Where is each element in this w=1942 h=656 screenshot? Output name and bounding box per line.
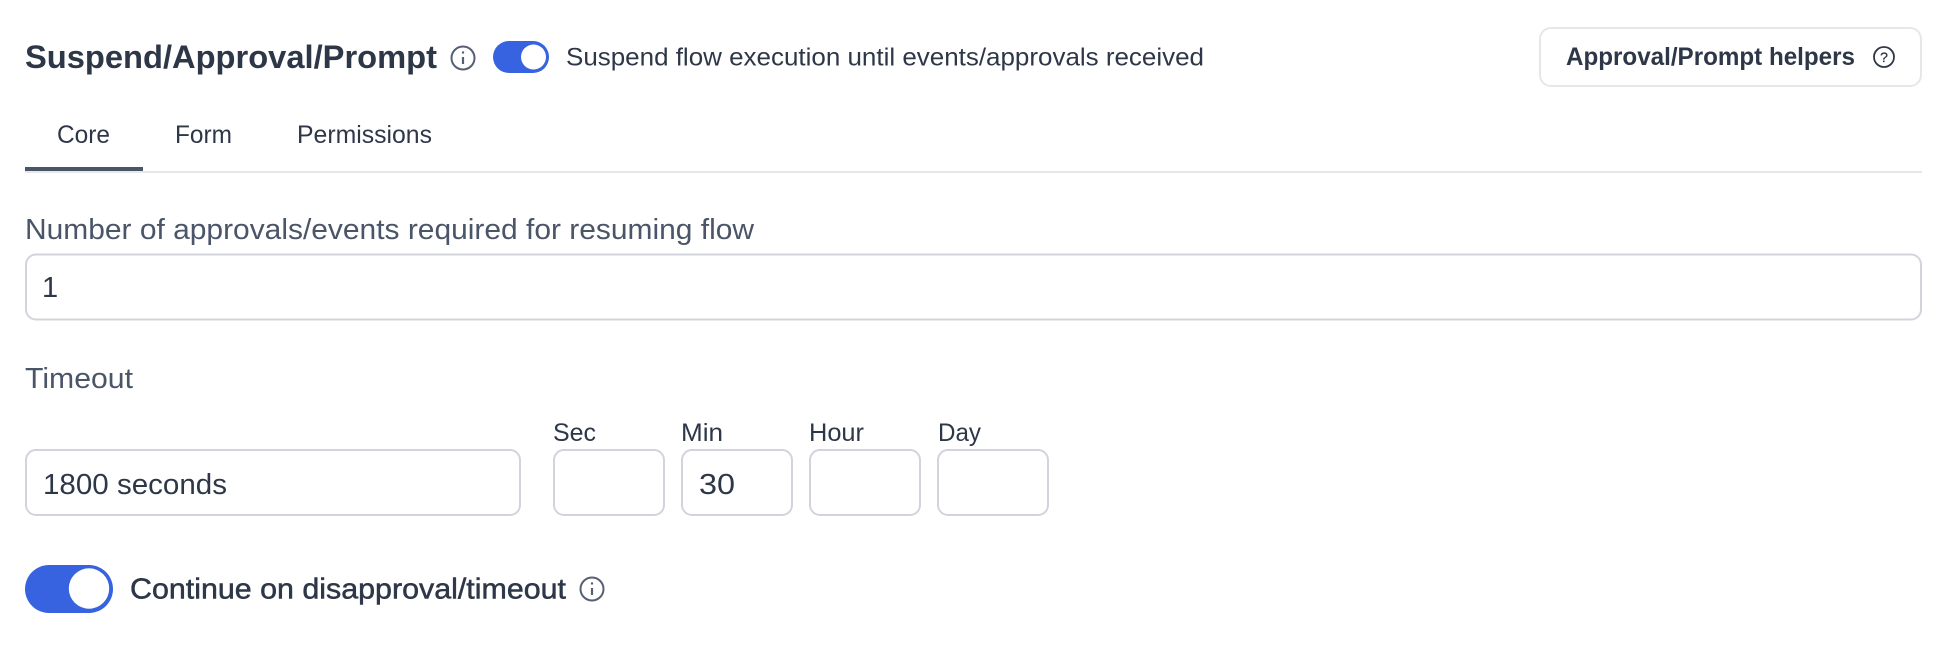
timeout seconds input xyxy=(26,450,520,515)
icon: title info xyxy=(452,46,474,70)
tab: form: Form xyxy=(175,121,232,149)
toggle label: Continue on disapproval/timeout xyxy=(130,574,566,606)
icon: continue info xyxy=(580,578,604,600)
timeout seconds input: 1800 seconds xyxy=(43,469,227,501)
tabs xyxy=(25,121,1922,173)
tab: core: Core xyxy=(57,121,110,149)
field: timeout xyxy=(25,363,1048,515)
tab: permissions: Permissions xyxy=(297,121,432,149)
toggle: suspend flow xyxy=(493,41,549,73)
field: number of approvals xyxy=(25,214,1921,320)
continue on disapproval row xyxy=(25,565,604,613)
day input: Day xyxy=(938,419,981,447)
button: approval prompt helpers: Approval/Prompt helpers xyxy=(1566,43,1855,71)
timeout label: Timeout xyxy=(25,363,133,395)
hour input xyxy=(809,419,920,515)
header row xyxy=(25,39,1204,75)
hour input: Hour xyxy=(809,419,864,447)
sec input xyxy=(553,419,664,515)
toggle label: Suspend flow execution until events/approvals received xyxy=(566,44,1204,72)
min input xyxy=(681,419,792,515)
text input xyxy=(26,254,1921,320)
icon: help question xyxy=(1874,47,1894,67)
min input: Min xyxy=(681,419,723,447)
sec input: Sec xyxy=(553,419,596,447)
min input: 30 xyxy=(699,469,735,501)
day input xyxy=(938,419,1048,515)
active tab underline xyxy=(25,167,143,171)
field label: Number of approvals/events required for resuming flow xyxy=(25,214,755,246)
title: Suspend/Approval/Prompt xyxy=(25,39,437,75)
button: approval prompt helpers xyxy=(1540,28,1921,86)
icon: help question: ? xyxy=(1880,49,1888,65)
input value: 1 xyxy=(42,272,58,304)
toggle: continue xyxy=(25,565,113,613)
